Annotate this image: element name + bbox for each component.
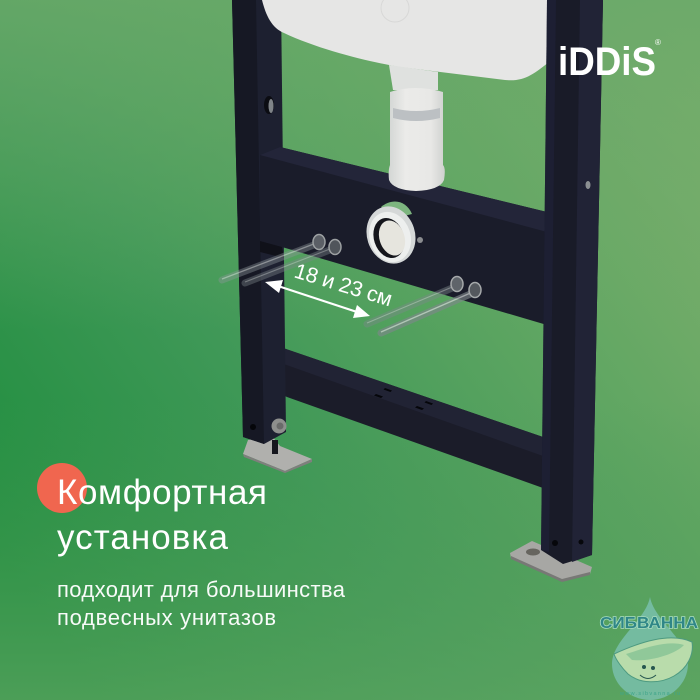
description text [57, 577, 346, 630]
iddis logo: ® [655, 38, 661, 47]
accent circle [37, 463, 87, 513]
sibvanna watermark: www.sibvanna.ru [619, 691, 680, 697]
drain pipe [389, 65, 445, 191]
waste outlet flange [359, 200, 423, 270]
heading [57, 473, 267, 557]
left frame post [232, 0, 286, 444]
sibvanna watermark [600, 597, 698, 700]
middle crossbar with mounting plate [260, 147, 547, 325]
sibvanna watermark: СИБВАННА [600, 615, 698, 632]
double-headed dimension arrow [265, 280, 370, 318]
right foot bracket [510, 541, 592, 582]
lower crossbar [262, 348, 543, 488]
description text: подвесных унитазов [57, 605, 276, 630]
right threaded studs [367, 276, 481, 333]
left threaded studs [222, 234, 341, 283]
white cistern tank [262, 0, 549, 80]
dimension label: 18 и 23 см [292, 259, 395, 311]
heading: установка [57, 518, 229, 557]
left foot bracket [243, 436, 312, 473]
iddis logo: iDDiS [558, 40, 656, 84]
description text: подходит для большинства [57, 577, 346, 602]
right frame post [541, 0, 603, 564]
heading: Комфортная [57, 473, 267, 512]
